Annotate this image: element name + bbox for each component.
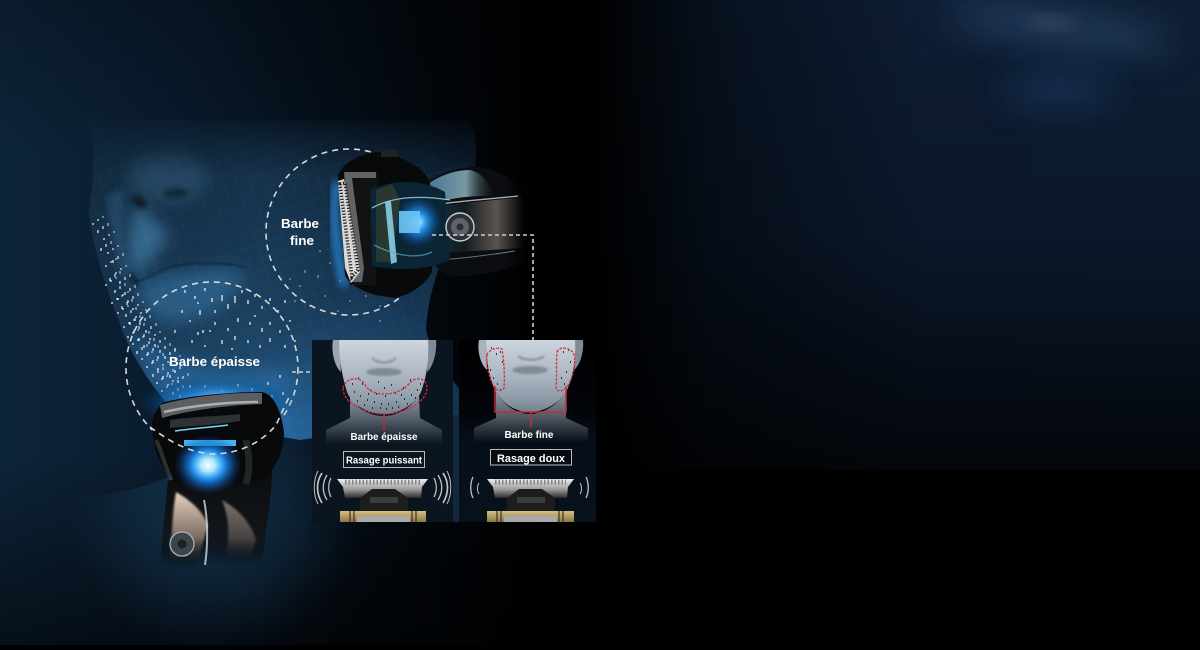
- dashed circle: barbe fine: [266, 149, 432, 315]
- cutter block: [487, 479, 574, 522]
- beard zone outline: [343, 379, 427, 414]
- beard dots: [352, 378, 421, 409]
- shoulder arc under the jaw: [40, 420, 420, 650]
- label: Barbe fine: Barbe: [281, 216, 319, 231]
- bracket: [495, 386, 566, 427]
- power button: [446, 213, 474, 241]
- lower shaver: [152, 392, 284, 568]
- handle: [160, 470, 272, 565]
- beard dots: [490, 348, 573, 390]
- handle: [415, 167, 526, 276]
- dashed circle: barbe épaisse: [126, 282, 298, 454]
- sound waves: [471, 477, 588, 498]
- side blue glow: [335, 182, 345, 286]
- badge: Rasage doux: [490, 450, 572, 465]
- badge: Rasage doux: Rasage doux: [497, 453, 566, 465]
- top clip: [381, 149, 399, 157]
- sound waves: [314, 471, 451, 504]
- head body: [338, 150, 432, 298]
- glow above lower shaver: [140, 378, 296, 426]
- label: Barbe fine: fine: [290, 233, 314, 248]
- cutter block: [337, 479, 428, 522]
- panel: barbe épaisse: [312, 340, 453, 522]
- head: [152, 392, 284, 482]
- label: Barbe épaisse: Barbe épaisse: [169, 354, 260, 369]
- gap between panels: [453, 415, 459, 522]
- head illustration: [326, 340, 442, 444]
- panel: barbe fine: [459, 340, 596, 522]
- connector: barbe épaisse: [292, 371, 312, 373]
- panel: barbe fine: Barbe fine: [504, 429, 554, 441]
- foil: [344, 172, 376, 282]
- panel: barbe épaisse: Barbe épaisse: [350, 431, 418, 443]
- cutaway interior: [370, 182, 450, 269]
- face wireframe: [89, 120, 476, 440]
- blue core: [184, 440, 236, 446]
- upper shaver: [335, 149, 526, 298]
- label: Barbe fine: [281, 216, 319, 248]
- nose shading: [108, 152, 290, 430]
- dashed arc over lower shaver: [150, 395, 290, 454]
- stubble: [93, 216, 380, 401]
- beard zone outlines: [487, 348, 575, 391]
- nostrils and mouth: [130, 188, 245, 285]
- head illustration: [474, 340, 588, 442]
- badge: Rasage puissant: Rasage puissant: [346, 454, 422, 466]
- connector: barbe fine: [432, 235, 533, 340]
- badge: Rasage puissant: [344, 452, 424, 468]
